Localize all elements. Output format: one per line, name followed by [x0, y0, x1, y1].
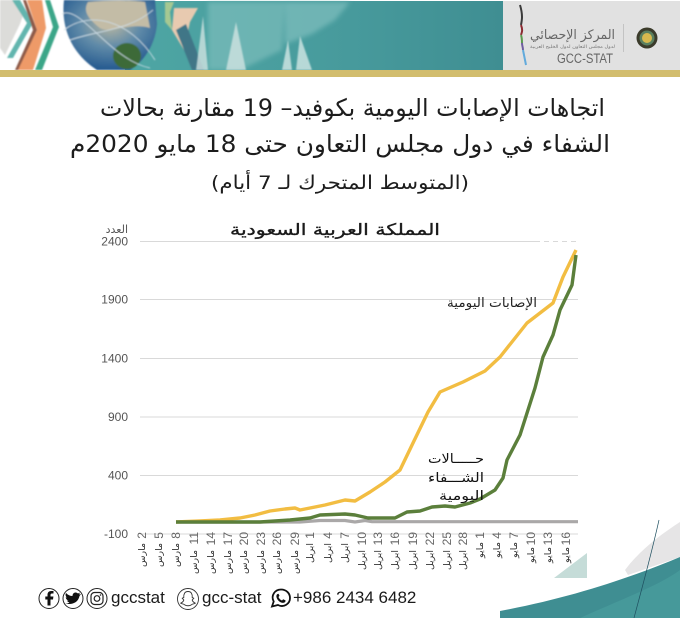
y axis unit: العدد — [106, 223, 128, 236]
x axis month labels: ابريل — [391, 550, 401, 570]
x axis month labels: مايو — [562, 547, 572, 564]
x axis day labels: 14 — [204, 532, 218, 545]
x axis day labels: 28 — [456, 532, 470, 545]
x axis day labels: 8 — [169, 532, 183, 539]
banner logo panel — [503, 1, 680, 70]
x axis month labels: ابريل — [306, 543, 316, 563]
title — [70, 94, 610, 194]
handle gccstat: gccstat — [111, 588, 165, 607]
x axis month labels: مايو — [493, 542, 503, 559]
x axis month labels: ابريل — [358, 550, 368, 570]
logo Arabic name: المركز الإحصائي — [530, 28, 615, 43]
gridline gap marks — [540, 240, 578, 242]
x axis day labels: 23 — [254, 532, 268, 545]
y axis labels — [101, 234, 128, 541]
social contact bar — [39, 588, 416, 610]
x axis month labels: ابريل — [443, 550, 453, 570]
x axis day labels: 4 — [490, 532, 504, 539]
x axis day labels: 7 — [338, 532, 352, 539]
title line 2: الشفاء في دول مجلس التعاون حتى 18 مايو 2020م — [70, 130, 610, 158]
x axis month labels: مايو — [544, 547, 554, 564]
icon: snapchat — [178, 588, 198, 610]
x axis day labels: 4 — [321, 532, 335, 539]
x axis month labels: مارس — [273, 550, 283, 574]
y axis labels: 900 — [108, 410, 128, 424]
x axis month labels: مايو — [510, 542, 520, 559]
x axis day labels: 10 — [524, 532, 538, 545]
x axis day labels: 5 — [152, 532, 166, 539]
x axis day labels: 11 — [187, 532, 201, 544]
x axis month labels: مايو — [527, 547, 537, 564]
line chart — [101, 220, 578, 574]
x axis month labels: مارس — [224, 550, 234, 574]
page corner fold — [554, 553, 587, 578]
x axis day labels: 7 — [507, 532, 521, 539]
daily recoveries line — [176, 255, 576, 522]
x axis day labels: 16 — [559, 532, 573, 545]
x axis day labels: 17 — [221, 532, 235, 545]
handle gcc-stat: gcc-stat — [202, 588, 262, 607]
x axis month labels: ابريل — [324, 543, 334, 563]
x axis month labels: ابريل — [341, 543, 351, 563]
daily infections line — [176, 250, 576, 522]
x axis month labels — [138, 542, 572, 574]
x axis day labels: 26 — [270, 532, 284, 545]
x axis month labels: مارس — [138, 543, 148, 567]
logo emblem — [636, 28, 658, 48]
x axis day labels: 25 — [440, 532, 454, 545]
x axis month labels: مارس — [291, 550, 301, 574]
x axis day labels: 20 — [237, 532, 251, 545]
label: daily infections: الإصابات اليومية — [447, 296, 537, 311]
x axis day labels: 22 — [423, 532, 437, 545]
y axis labels: 400 — [108, 468, 128, 482]
x axis month labels: ابريل — [459, 550, 469, 570]
x axis month labels: ابريل — [374, 550, 384, 570]
x axis day labels: 1 — [303, 532, 317, 539]
icon: instagram — [87, 588, 107, 608]
label: daily recoveries: اليومية — [439, 489, 484, 504]
phone number: +986 2434 6482 — [293, 588, 416, 607]
y axis labels: 2400 — [101, 234, 128, 248]
banner left chevrons — [0, 0, 59, 70]
icon: whatsapp — [272, 590, 290, 606]
logo GCC-STAT: GCC-STAT — [557, 51, 613, 66]
y axis labels: -100 — [104, 527, 128, 541]
label: daily recoveries: حـــــالات — [428, 452, 484, 467]
x axis month labels: مارس — [172, 543, 182, 567]
x axis day labels — [135, 532, 573, 545]
x axis month labels: مارس — [207, 550, 217, 574]
banner globe — [62, 0, 157, 70]
label: daily recoveries — [428, 452, 484, 504]
y axis labels: 1900 — [101, 292, 128, 306]
logo ribbon — [520, 5, 526, 65]
x axis month labels: مارس — [240, 550, 250, 574]
banner ship and skyline — [165, 2, 350, 70]
x axis day labels: 19 — [406, 532, 420, 545]
banner teal background — [125, 1, 503, 70]
title line 3: (المتوسط المتحرك لـ 7 أيام) — [211, 170, 469, 194]
y axis labels: 1400 — [101, 352, 128, 366]
icon: twitter — [63, 588, 83, 608]
header banner — [0, 0, 680, 77]
icon: facebook — [39, 588, 59, 608]
x axis day labels: 16 — [388, 532, 402, 545]
x axis month labels: ابريل — [426, 550, 436, 570]
label: daily recoveries: الشـــفاء — [428, 471, 484, 486]
x axis month labels: مارس — [257, 550, 267, 574]
x axis month labels: ابريل — [409, 550, 419, 570]
x axis day labels: 13 — [541, 532, 555, 545]
x axis month labels: مايو — [476, 542, 486, 559]
x axis day labels: 29 — [288, 532, 302, 545]
banner gold stripe — [0, 70, 680, 77]
x axis month labels: مارس — [190, 550, 200, 574]
title line 1: اتجاهات الإصابات اليومية بكوفيد– 19 مقارنة بحالات — [100, 94, 605, 122]
x axis day labels: 1 — [473, 532, 487, 539]
x axis month labels: مارس — [155, 543, 165, 567]
bottom swoosh — [500, 520, 680, 618]
grid lines — [140, 242, 578, 534]
x axis day labels: 13 — [371, 532, 385, 545]
x axis day labels: 10 — [355, 532, 369, 545]
logo subtitle: لدول مجلس التعاون لدول الخليج العربية — [530, 45, 615, 50]
chart title: المملكة العربية السعودية — [230, 220, 440, 240]
logo separator — [623, 24, 624, 52]
x axis day labels: 2 — [135, 532, 149, 539]
gray series line — [176, 520, 578, 522]
